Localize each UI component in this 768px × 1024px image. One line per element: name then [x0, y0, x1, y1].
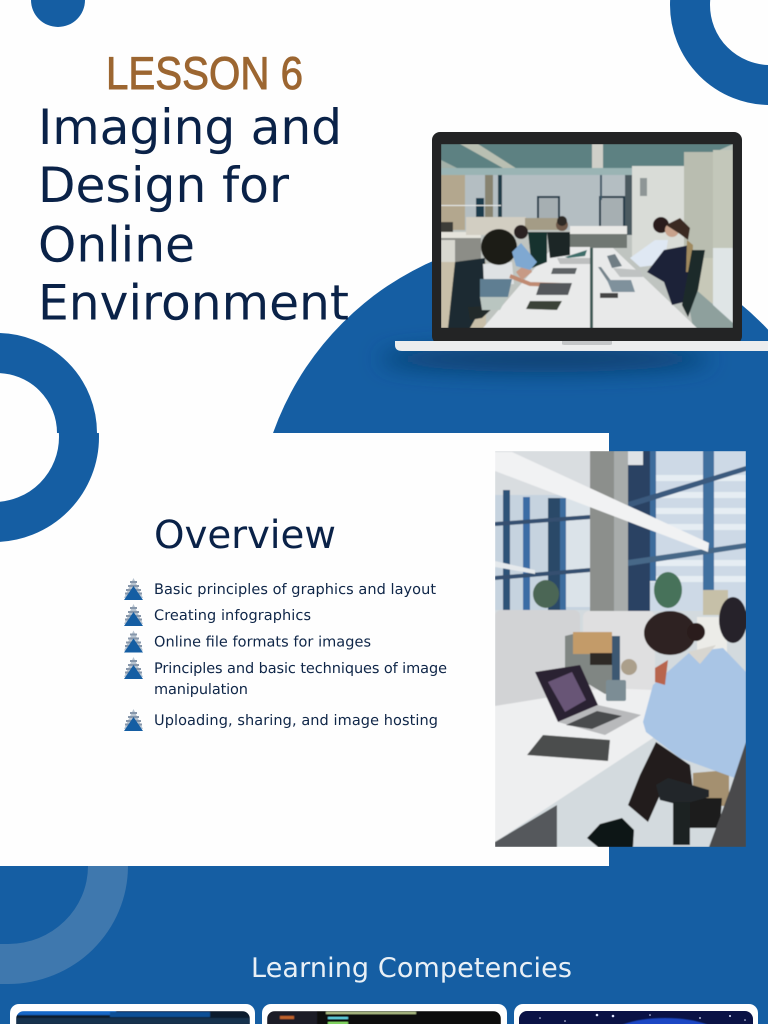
- overview list text: Online file formats for images: [154, 634, 371, 650]
- decorative shape: left ring: [0, 352, 79, 522]
- learning competencies heading: Learning Competencies: [251, 953, 572, 984]
- card 2: [262, 1004, 507, 1024]
- overview list text: manipulation: [154, 682, 248, 698]
- title: [38, 100, 349, 332]
- lesson label: LESSON 6: [106, 47, 303, 99]
- blue lower background: [0, 433, 768, 1024]
- bullet icon 2: [124, 604, 143, 626]
- laptop base: [395, 341, 768, 351]
- overview heading: Overview: [154, 513, 336, 558]
- laptop with meeting photo: [380, 132, 768, 372]
- laptop shadow: [380, 346, 710, 372]
- laptop bezel: [432, 132, 742, 344]
- meeting photo: [441, 144, 733, 328]
- title: Design for: [38, 158, 290, 214]
- overview list text: Principles and basic techniques of image: [154, 661, 447, 677]
- card 3: [514, 1004, 758, 1024]
- bullet icon 4: [124, 657, 143, 679]
- bullet icon 3: [124, 630, 143, 652]
- bullet icon 5: [124, 709, 143, 731]
- decorative shape: top tab: [31, 0, 85, 27]
- bullet icon 1: [124, 578, 143, 600]
- overview list text: Uploading, sharing, and image hosting: [154, 713, 438, 729]
- overview list text: Basic principles of graphics and layout: [154, 582, 436, 598]
- laptop hinge notch: [562, 341, 612, 345]
- title: Online: [38, 218, 195, 274]
- overview photo: office worker: [495, 451, 747, 847]
- overview white panel: [0, 433, 609, 866]
- decorative shape: bottom ring: [0, 866, 128, 984]
- decorative shape: large blue circle: [256, 236, 768, 828]
- overview list text: [154, 582, 447, 729]
- title: Environment: [38, 276, 349, 332]
- title: Imaging and: [38, 100, 342, 156]
- overview list text: Creating infographics: [154, 608, 311, 624]
- decorative shape: top right ring: [690, 0, 768, 85]
- card 1: [10, 1004, 255, 1024]
